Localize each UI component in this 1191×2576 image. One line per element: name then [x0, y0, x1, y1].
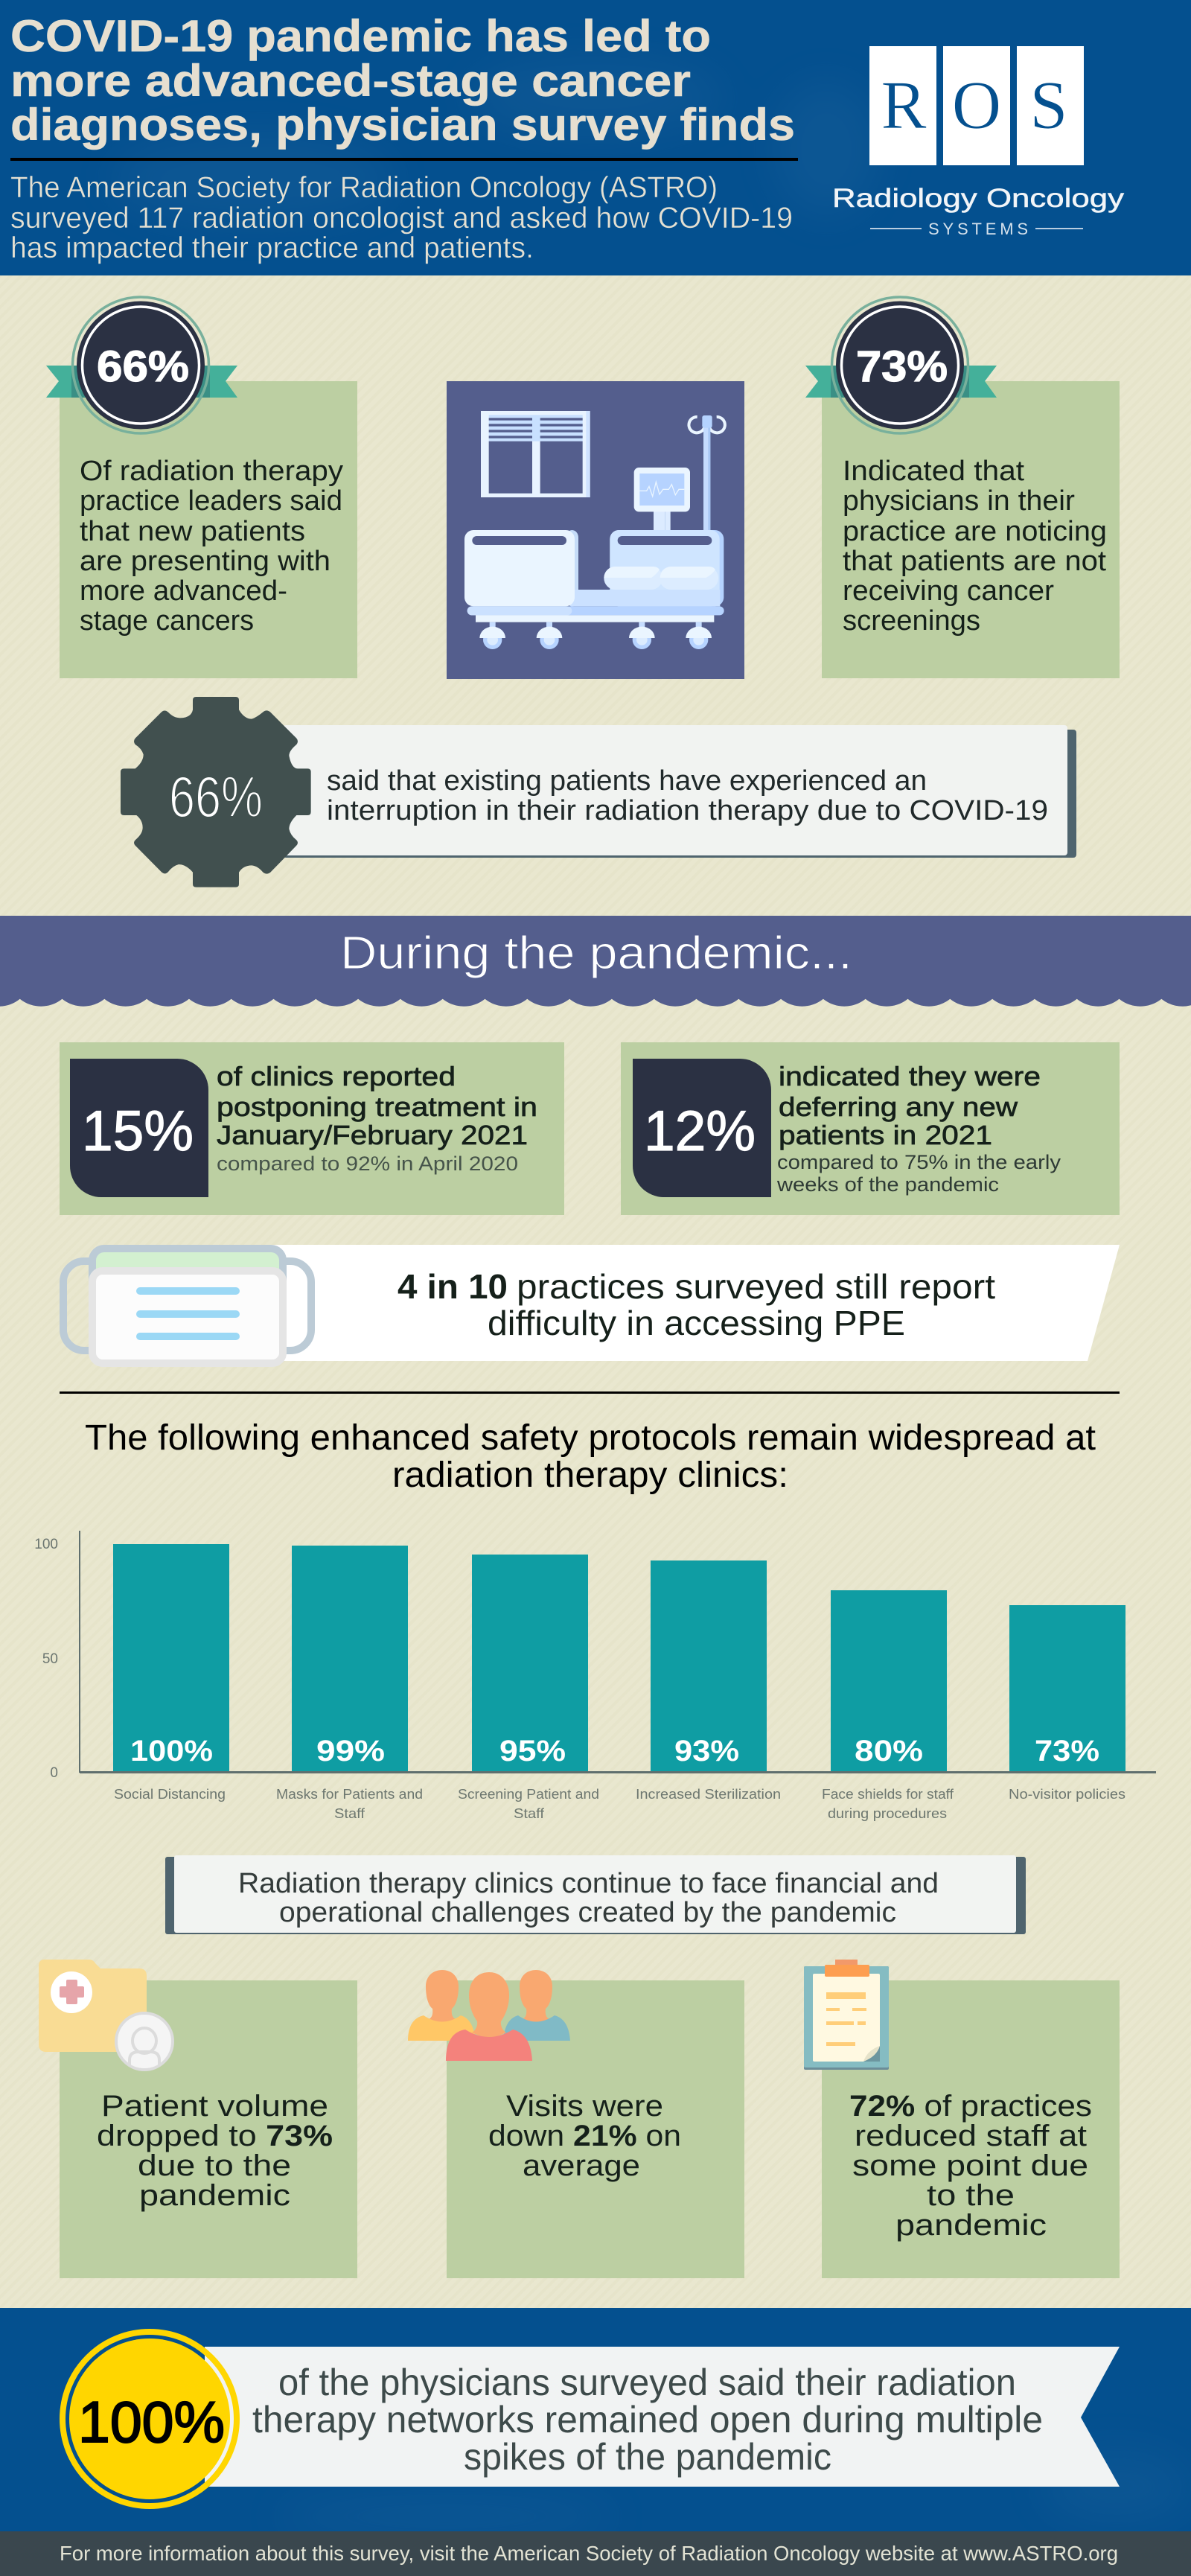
ribbon	[205, 2347, 1120, 2487]
category labels: Increased Sterilization	[636, 1787, 781, 1802]
panel text	[97, 2090, 333, 2212]
logo: ROS: O	[952, 67, 1001, 143]
y axis labels: 0	[50, 1765, 58, 1781]
callout: financial challenges: Radiation therapy clinics continue to face financial and	[238, 1868, 939, 1899]
panel text: deferring any new	[779, 1091, 1018, 1122]
logo: ROS: Radiology Oncology	[832, 184, 1125, 213]
category labels: Staff	[334, 1806, 365, 1821]
panel text: Indicated that	[843, 456, 1024, 487]
badge: 100%	[63, 2332, 237, 2506]
heading: safety protocols: The following enhanced safety protocols remain widespread at	[85, 1418, 1096, 1458]
panel text: due to the	[138, 2149, 291, 2182]
badge: 73%: 73%	[856, 342, 948, 391]
stat tile: 12%	[633, 1059, 771, 1197]
panel: 12% deferring: weeks of the pandemic	[776, 1173, 999, 1196]
panel text: dropped to 73%	[97, 2120, 333, 2152]
panel text: pandemic	[139, 2179, 290, 2212]
stat tile: 12%: 12%	[644, 1100, 756, 1163]
y axis labels: 100	[34, 1537, 58, 1552]
panel text: Of radiation therapy	[80, 456, 343, 487]
panel text	[779, 1061, 1041, 1150]
panel text: practice are noticing	[843, 516, 1107, 547]
header banner	[0, 0, 1191, 275]
panel text: stage cancers	[80, 605, 254, 637]
heading: safety protocols: radiation therapy clinics:	[392, 1456, 788, 1495]
title	[10, 11, 795, 150]
callout text	[397, 1267, 995, 1342]
panel text: practice leaders said	[80, 485, 342, 517]
bar chart	[34, 1531, 1156, 1821]
logo: ROS: R	[881, 67, 927, 143]
panel text: are presenting with	[80, 546, 331, 577]
panel: 15% postponing	[60, 1042, 564, 1215]
ribbon text: of the physicians surveyed said their radiation	[278, 2362, 1016, 2403]
ribbon text: spikes of the pandemic	[464, 2436, 831, 2478]
footer banner: 100%	[0, 2308, 1191, 2539]
stat tile: 15%: 15%	[82, 1100, 194, 1163]
callout text: interruption in their radiation therapy due to COVID-19	[327, 795, 1048, 826]
icon: window	[481, 411, 590, 497]
bar values: 80%	[855, 1735, 923, 1767]
category labels: No-visitor policies	[1009, 1787, 1125, 1802]
panel text: screenings	[843, 605, 980, 637]
bar values: 95%	[499, 1735, 566, 1767]
panel text: January/February 2021	[217, 1120, 528, 1150]
bar values: 99%	[316, 1735, 385, 1767]
footer	[0, 2531, 1191, 2576]
category labels	[114, 1787, 1125, 1821]
stat tile: 15%	[70, 1059, 208, 1197]
heading: safety protocols	[85, 1418, 1096, 1495]
panel text: receiving cancer	[843, 576, 1054, 607]
section banner: During the pandemic: During the pandemic...	[340, 928, 852, 979]
callout text: practices surveyed still report	[517, 1267, 995, 1306]
panel: patient volume	[39, 1960, 357, 2278]
ribbon text: therapy networks remained open during multiple	[252, 2399, 1043, 2440]
intro text: surveyed 117 radiation oncologist and asked how COVID-19	[10, 202, 793, 235]
callout: PPE difficulty	[63, 1245, 1120, 1363]
icon: face mask	[63, 1249, 311, 1363]
logo: ROS: S	[1029, 67, 1068, 143]
panel text: some point due	[852, 2149, 1088, 2182]
title: diagnoses, physician survey finds	[10, 100, 795, 150]
panel text: that new patients	[80, 516, 305, 547]
bar values	[130, 1735, 1099, 1767]
badge: 66%	[46, 297, 237, 433]
category labels: Staff	[514, 1806, 545, 1821]
panel text: physicians in their	[843, 485, 1075, 517]
panel: 73% screenings	[805, 297, 1120, 678]
icon: wheels	[479, 622, 712, 649]
category labels: Social Distancing	[114, 1787, 226, 1802]
footer: For more information about this survey, visit the American Society of Radiation Oncology website at www.ASTRO.org	[60, 2542, 1118, 2565]
panel text	[843, 456, 1107, 637]
panel: 12% deferring	[621, 1042, 1120, 1215]
icon: gear	[121, 697, 311, 887]
panel: 15% postponing: compared to 92% in April 2020	[217, 1152, 518, 1175]
bar values: 100%	[130, 1735, 213, 1767]
ribbon text	[252, 2362, 1043, 2478]
panel text: indicated they were	[779, 1061, 1041, 1091]
intro text	[10, 171, 793, 264]
panel text: postponing treatment in	[217, 1091, 537, 1122]
panel text: that patients are not	[843, 546, 1106, 577]
category labels: during procedures	[828, 1806, 947, 1821]
category labels: Face shields for staff	[822, 1787, 954, 1802]
panel text: Visits were	[506, 2090, 663, 2123]
logo: ROS: SYSTEMS	[928, 220, 1028, 238]
panel text: reduced staff at	[855, 2120, 1087, 2152]
panel text: of clinics reported	[217, 1061, 456, 1091]
panel text	[80, 456, 343, 637]
callout: 66% interruption: 66%	[169, 764, 263, 829]
section banner: During the pandemic	[0, 916, 1191, 1007]
panel text: average	[523, 2149, 640, 2182]
title: COVID-19 pandemic has led to	[10, 11, 711, 61]
callout: financial challenges: operational challenges created by the pandemic	[279, 1897, 896, 1928]
panel: visits	[408, 1970, 744, 2278]
bars	[113, 1544, 1125, 1772]
icon: IV pole	[689, 415, 725, 531]
intro text: has impacted their practice and patients.	[10, 232, 534, 264]
panel: 12% deferring: compared to 75% in the early	[777, 1151, 1061, 1173]
callout text: 4 in 10	[397, 1267, 508, 1306]
callout text: difficulty in accessing PPE	[488, 1304, 905, 1342]
panel text: patients in 2021	[779, 1120, 992, 1150]
callout: financial challenges	[165, 1855, 1026, 1934]
panel text: 72% of practices	[849, 2090, 1092, 2123]
y axis labels	[34, 1537, 58, 1781]
panel text: more advanced-	[80, 576, 287, 607]
category labels: Screening Patient and	[458, 1787, 599, 1802]
badge: 73%	[805, 297, 997, 433]
panel text: to the	[927, 2179, 1015, 2212]
badge: 100%: 100%	[78, 2389, 225, 2455]
panel text	[488, 2090, 681, 2182]
callout: 66% interruption	[121, 697, 1076, 887]
panel text	[217, 1061, 537, 1150]
callout text: said that existing patients have experienced an	[327, 765, 927, 797]
title: more advanced-stage cancer	[10, 56, 691, 106]
panel text: Patient volume	[101, 2090, 328, 2123]
panel text: down 21% on	[488, 2120, 681, 2152]
panel text: pandemic	[895, 2209, 1047, 2242]
panel: 66% new patients	[46, 297, 357, 678]
icon: bed	[464, 530, 724, 622]
panel: reduced staff	[804, 1960, 1120, 2278]
callout text	[327, 765, 1048, 826]
category labels: Masks for Patients and	[276, 1787, 423, 1802]
panel text	[849, 2090, 1092, 2242]
logo: ROS	[832, 46, 1125, 238]
icon: people	[408, 1970, 570, 2061]
icon: monitor	[634, 468, 690, 531]
intro text: The American Society for Radiation Oncology (ASTRO)	[10, 171, 718, 204]
icon: clipboard	[804, 1960, 889, 2070]
bar values: 93%	[674, 1735, 739, 1767]
icon: medical folder	[39, 1960, 173, 2070]
bar values: 73%	[1035, 1735, 1099, 1767]
illustration: hospital bed	[447, 381, 744, 679]
badge: 66%: 66%	[97, 342, 189, 391]
y axis labels: 50	[42, 1651, 58, 1667]
